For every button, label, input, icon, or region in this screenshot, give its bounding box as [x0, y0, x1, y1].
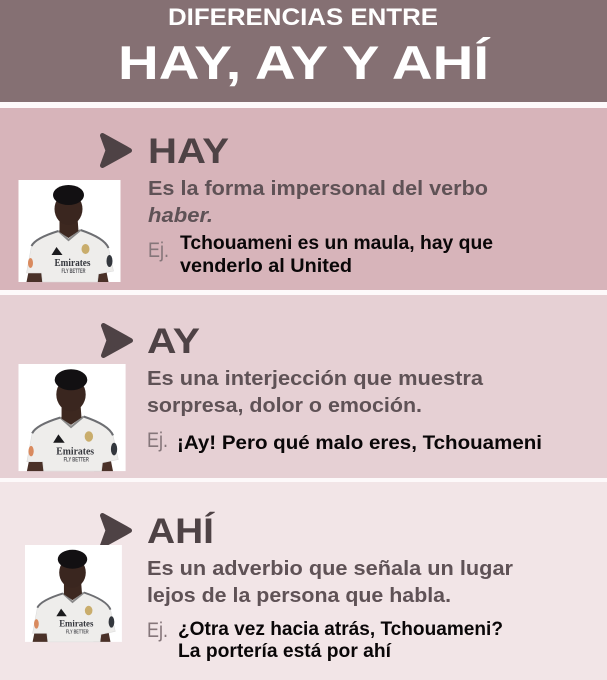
example: AHÍ: La portería está por ahí	[178, 640, 392, 662]
definition: AY: sorpresa, dolor o emoción.	[147, 395, 422, 417]
photo: player AHÍ: FLY BETTER	[66, 629, 89, 635]
photo: player HAY	[18, 180, 120, 282]
photo: player AY: Emirates	[56, 446, 94, 457]
definition: AHÍ: lejos de la persona que habla.	[147, 585, 451, 607]
heading: AY: AY	[147, 322, 200, 361]
example label: AHÍ: Ej.	[147, 619, 168, 642]
panel: AY	[0, 295, 607, 478]
definition: AHÍ	[147, 558, 513, 607]
definition: AY	[147, 368, 484, 417]
photo: player AHÍ: Emirates	[59, 620, 94, 630]
header kicker: DIFERENCIAS ENTRE	[168, 4, 438, 31]
example: HAY	[180, 232, 493, 277]
example label: HAY: Ej.	[148, 239, 169, 262]
icon: arrow AHÍ	[102, 516, 130, 546]
heading: AHÍ: AHÍ	[147, 511, 215, 551]
photo: player HAY: FLY BETTER	[62, 269, 86, 275]
definition: HAY: haber.	[148, 205, 213, 227]
definition: AHÍ: Es un adverbio que señala un lugar	[147, 558, 513, 580]
photo: player AY: FLY BETTER	[64, 457, 89, 464]
example label: AY: Ej.	[147, 429, 168, 452]
icon: arrow HAY	[102, 136, 130, 166]
icon: arrow AY	[104, 326, 130, 356]
photo: player AHÍ	[25, 545, 122, 642]
definition: AY: Es una interjección que muestra	[147, 368, 484, 390]
main title: HAY, AY Y AHÍ	[118, 36, 491, 89]
definition: HAY: Es la forma impersonal del verbo	[148, 178, 488, 200]
definition: HAY	[148, 178, 488, 227]
example: AHÍ: ¿Otra vez hacia atrás, Tchouameni?	[178, 618, 503, 640]
example: HAY: Tchouameni es un maula, hay que	[180, 232, 493, 254]
example: HAY: venderlo al United	[180, 255, 352, 277]
photo: player HAY: Emirates	[54, 258, 91, 269]
panel: AHÍ	[0, 482, 607, 680]
example: AHÍ	[178, 618, 503, 662]
panel: HAY	[0, 108, 607, 290]
photo: player AY	[18, 364, 126, 471]
example: AY: ¡Ay! Pero qué malo eres, Tchouameni	[177, 432, 542, 454]
header band	[0, 0, 607, 102]
heading: HAY: HAY	[148, 132, 229, 171]
